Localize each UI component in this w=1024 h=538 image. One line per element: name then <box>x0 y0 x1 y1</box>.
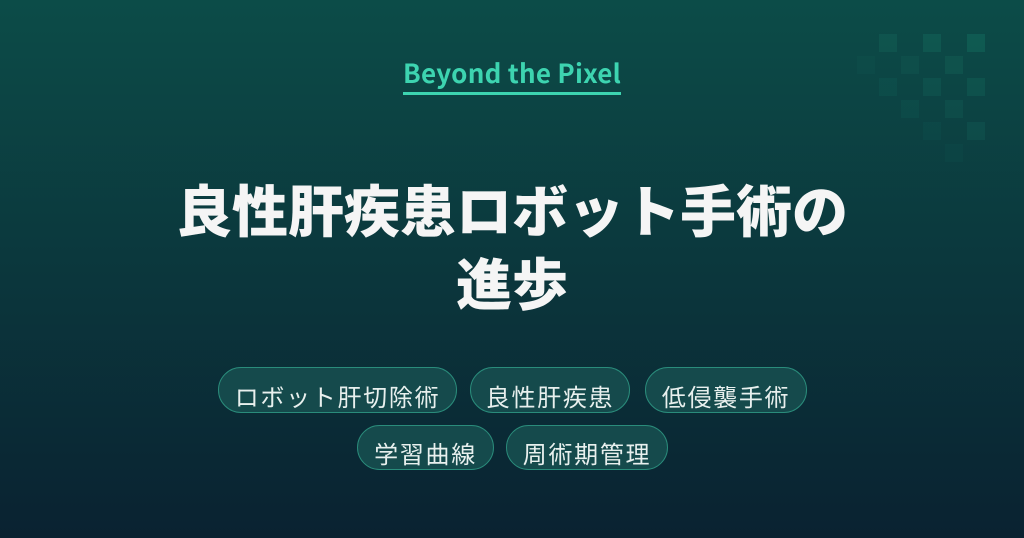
tag: 良性肝疾患 <box>470 367 630 412</box>
tag: ロボット肝切除術 <box>218 367 457 412</box>
tag: 低侵襲手術: 低侵襲手術 <box>662 378 790 412</box>
tag: 学習曲線 <box>357 424 494 470</box>
tag: 低侵襲手術 <box>645 367 807 412</box>
title: 進歩 <box>456 241 568 322</box>
tag: ロボット肝切除術: ロボット肝切除術 <box>235 378 440 412</box>
keyword tags <box>218 367 807 470</box>
tag: 周術期管理: 周術期管理 <box>523 435 651 470</box>
tag: 学習曲線: 学習曲線 <box>374 435 477 470</box>
title <box>176 168 848 322</box>
decorative pixel grid icon <box>879 34 985 140</box>
title: 良性肝疾患ロボット手術の <box>176 168 848 249</box>
tag: 良性肝疾患: 良性肝疾患 <box>486 378 614 412</box>
tag: 周術期管理 <box>506 424 668 470</box>
brand label: Beyond the Pixel: Beyond the Pixel <box>403 54 621 91</box>
